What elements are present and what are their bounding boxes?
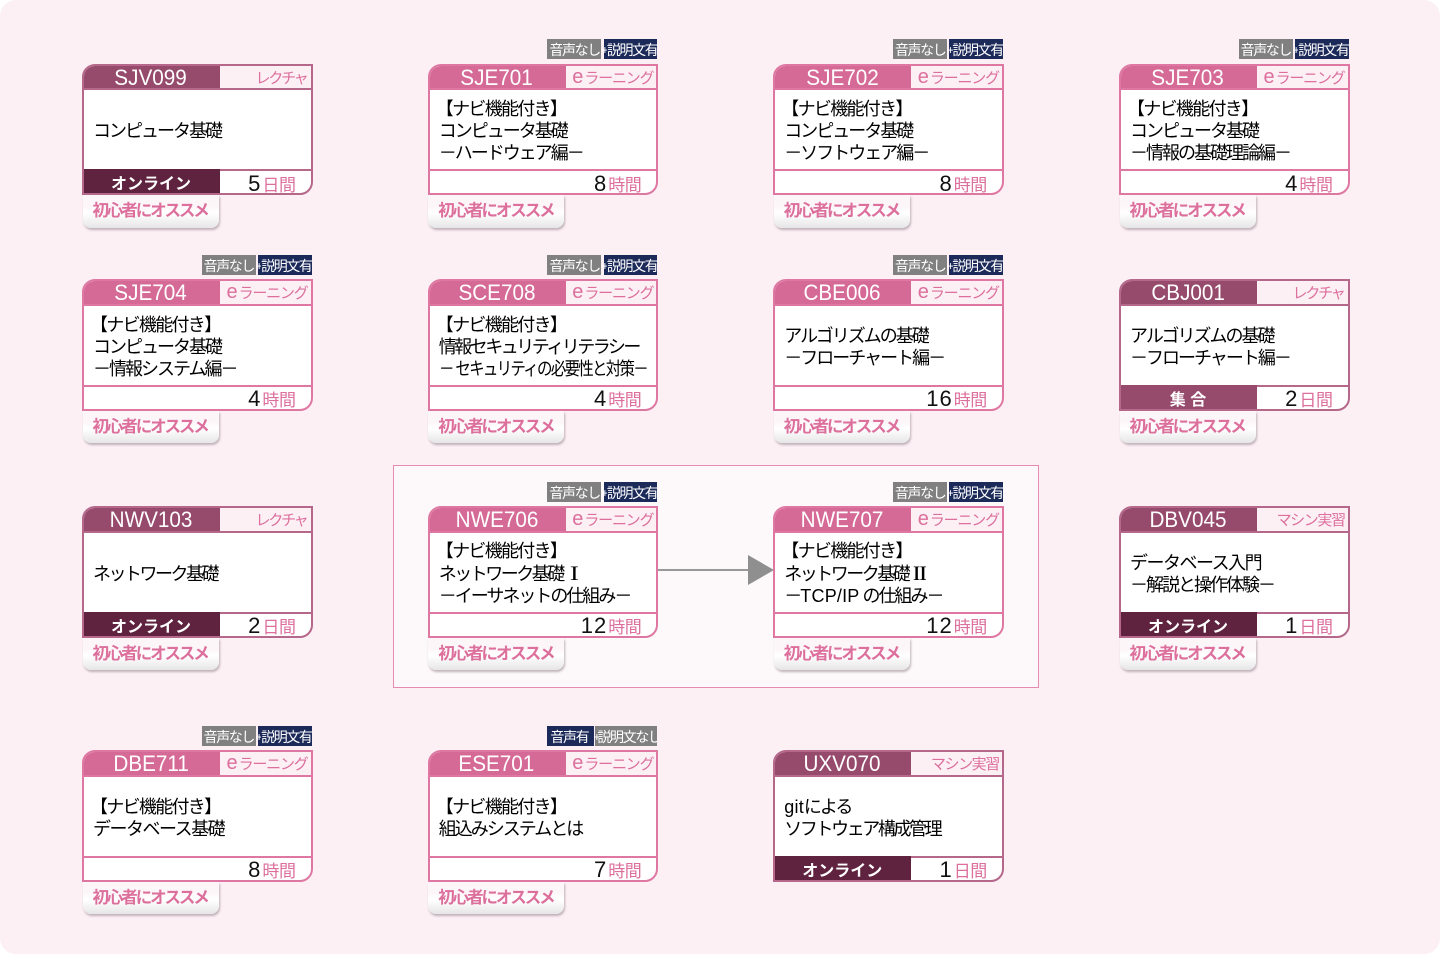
course card: ESE701: + xyxy=(593,730,599,744)
course card: SCE708: 4時間 xyxy=(594,386,641,411)
course card: CBE006: + xyxy=(947,259,952,273)
course card: ESE701 xyxy=(428,726,658,918)
course card: SJE702: SJE702 xyxy=(806,64,879,90)
course card: NWE706: ネットワーク基礎 Ⅰ xyxy=(439,560,583,586)
course card: NWV103: NWV103 xyxy=(110,507,192,532)
course card: NWE706: 12時間 xyxy=(581,613,641,638)
course card: DBV045: オンライン xyxy=(1148,619,1228,636)
course card: NWE706: －イーサネットの仕組み－ xyxy=(439,586,630,606)
course card: SCE708: 【ナビ機能付き】 xyxy=(436,315,566,335)
course card: CBJ001: レクチャ xyxy=(1293,285,1344,302)
course card: SJE701: SJE701 xyxy=(461,64,533,90)
course card: SCE708 xyxy=(428,255,658,446)
course card: SJE701: 音声なし xyxy=(549,42,600,58)
course card: SCE708: eラーニング xyxy=(572,281,653,303)
course card: SJE702: 8時間 xyxy=(939,170,987,195)
course card: UXV070: マシン実習 xyxy=(931,756,999,773)
course card: NWV103: ネットワーク基礎 xyxy=(93,564,217,584)
course card: NWE707 xyxy=(773,482,1004,674)
course card: UXV070 xyxy=(773,750,1004,882)
course card: SJE704: 音声なし xyxy=(204,258,254,274)
course card: SCE708: 音声なし xyxy=(549,258,600,274)
course card: SJE702: コンピュータ基礎 xyxy=(784,121,912,141)
course card: SJE702: 初心者にオススメ xyxy=(784,202,899,220)
course card: SCE708: SCE708 xyxy=(458,280,535,305)
course card: NWE706: 【ナビ機能付き】 xyxy=(436,541,566,561)
course card: ESE701: ESE701 xyxy=(459,751,535,776)
course card: UXV070: gitによる xyxy=(784,797,851,817)
course card: SJE704 xyxy=(82,255,313,446)
course card: CBE006: －フローチャート編－ xyxy=(784,348,944,368)
course card: CBJ001: －フローチャート編－ xyxy=(1130,348,1290,368)
course card: NWE707: 12時間 xyxy=(926,613,987,638)
course card: CBJ001: アルゴリズムの基礎 xyxy=(1130,326,1273,346)
course card: NWE707: ネットワーク基礎 Ⅱ xyxy=(784,560,929,586)
course card: CBE006: 16時間 xyxy=(926,386,987,411)
course card: SJE703: コンピュータ基礎 xyxy=(1130,121,1258,141)
course card: ESE701: 組込みシステムとは xyxy=(439,819,582,839)
course card: NWV103: 2日間 xyxy=(248,613,296,638)
course card: CBE006 xyxy=(773,255,1004,446)
course card: DBV045: －解説と操作体験－ xyxy=(1130,575,1274,595)
course card: SJE702: 説明文有 xyxy=(952,42,1003,58)
course card: SJE702: －ソフトウェア編－ xyxy=(784,143,928,163)
course card: SJE704: 【ナビ機能付き】 xyxy=(90,315,220,335)
course card: NWV103 xyxy=(82,506,313,674)
course card: SCE708: 情報セキュリティリテラシー xyxy=(439,337,639,357)
course card: CBE006: CBE006 xyxy=(804,280,881,305)
course card: SJE702: 【ナビ機能付き】 xyxy=(781,99,912,119)
course card: SJE701: 【ナビ機能付き】 xyxy=(436,99,566,119)
arrow: NWE706 to NWE707 xyxy=(658,555,773,585)
course card: CBE006: アルゴリズムの基礎 xyxy=(784,326,928,346)
course card: DBV045: 初心者にオススメ xyxy=(1130,645,1245,663)
course card: SCE708: 初心者にオススメ xyxy=(438,418,554,436)
course card: NWE706: NWE706 xyxy=(455,507,538,532)
course card: SJE703: 初心者にオススメ xyxy=(1130,202,1245,220)
course card: NWE706 xyxy=(428,482,658,674)
course card: CBE006: 初心者にオススメ xyxy=(784,418,899,436)
course card: NWV103: 初心者にオススメ xyxy=(92,645,208,663)
course card: SJE703: 【ナビ機能付き】 xyxy=(1127,99,1257,119)
course card: SJE703 xyxy=(1119,39,1350,232)
course card: SJE703: SJE703 xyxy=(1152,64,1224,90)
course card: NWE707: －TCP/IP の仕組み－ xyxy=(784,586,943,606)
course card: SJE704: コンピュータ基礎 xyxy=(93,337,221,357)
panel: network course group frame xyxy=(393,465,1039,688)
course card: CBE006: 音声なし xyxy=(895,258,945,274)
course card: SJE704: 初心者にオススメ xyxy=(92,418,208,436)
course card: SJE701: + xyxy=(601,43,607,57)
course card: ESE701: 7時間 xyxy=(594,857,641,882)
course card: DBE711: DBE711 xyxy=(113,751,189,776)
course card: DBE711: 音声なし xyxy=(204,729,254,745)
course card: DBE711: eラーニング xyxy=(226,752,308,774)
course card: SJE704: －情報システム編－ xyxy=(93,359,236,379)
course card: NWE707: eラーニング xyxy=(918,508,999,530)
course card: CBJ001 xyxy=(1119,279,1350,446)
course card: SJE701: コンピュータ基礎 xyxy=(439,121,567,141)
course card: NWE707: NWE707 xyxy=(801,507,884,532)
course card: SJV099: レクチャ xyxy=(256,70,307,86)
course card: DBE711: 【ナビ機能付き】 xyxy=(90,797,220,817)
course card: CBJ001: 初心者にオススメ xyxy=(1130,418,1245,436)
course card: DBE711: 8時間 xyxy=(248,857,296,882)
course card: DBV045: DBV045 xyxy=(1149,507,1227,532)
course card: CBE006: 説明文有 xyxy=(952,258,1003,274)
course card: SJE702 xyxy=(773,39,1004,232)
course card: SJE704: 説明文有 xyxy=(261,258,312,274)
course card: DBV045: 1日間 xyxy=(1285,613,1333,638)
course card: NWE707: 説明文有 xyxy=(952,485,1003,501)
course card: DBE711: 説明文有 xyxy=(261,729,312,745)
course card: ESE701: eラーニング xyxy=(572,752,653,774)
course card: NWE706: 初心者にオススメ xyxy=(438,645,554,663)
course card: NWE707: 音声なし xyxy=(895,485,945,501)
course card: SJE704: 4時間 xyxy=(248,386,296,411)
course card: NWE706: eラーニング xyxy=(572,508,653,530)
course card: SJE701: 初心者にオススメ xyxy=(438,202,554,220)
course card: SJE703: 説明文有 xyxy=(1298,42,1348,58)
course card: NWE707: 【ナビ機能付き】 xyxy=(781,541,912,561)
course card: SJE703: 4時間 xyxy=(1285,170,1333,195)
course card: DBV045: マシン実習 xyxy=(1277,512,1345,529)
course card: CBE006: eラーニング xyxy=(918,281,999,303)
course card: UXV070: 1日間 xyxy=(939,857,987,882)
course card: SCE708: 説明文有 xyxy=(607,258,657,274)
course card: DBV045: データベース入門 xyxy=(1130,553,1261,573)
course card: ESE701: 初心者にオススメ xyxy=(438,889,554,907)
course card: NWE706: 説明文有 xyxy=(607,485,657,501)
course card: SCE708: － セキュリティの必要性と対策－ xyxy=(439,359,647,379)
course card: UXV070: オンライン xyxy=(802,863,882,880)
course card: SJE701: 8時間 xyxy=(594,170,641,195)
course card: SJV099: 5日間 xyxy=(248,170,296,195)
course card: NWE707: + xyxy=(947,486,952,500)
course card: SJE704: eラーニング xyxy=(226,281,308,303)
course card: SJE703: + xyxy=(1293,43,1298,57)
course card: CBJ001: 集 合 xyxy=(1170,392,1206,409)
course card: SJE703: eラーニング xyxy=(1263,66,1345,88)
course card: DBE711: 初心者にオススメ xyxy=(92,889,208,907)
course card: CBJ001: 2日間 xyxy=(1285,386,1333,411)
course card: SJE704: + xyxy=(256,259,261,273)
course card: CBJ001: CBJ001 xyxy=(1151,280,1225,305)
course card: SJE703: 音声なし xyxy=(1241,42,1291,58)
course card: SJE702: 音声なし xyxy=(895,42,945,58)
course card: SJV099 xyxy=(82,64,313,232)
course card: SJV099: SJV099 xyxy=(115,64,187,90)
course card: SJV099: コンピュータ基礎 xyxy=(93,121,221,141)
course card: NWV103: レクチャ xyxy=(256,512,307,529)
course card: NWE707: 初心者にオススメ xyxy=(784,645,899,663)
course card: NWE706: + xyxy=(601,486,607,500)
course card: SJE701 xyxy=(428,39,658,232)
course card: SJE701: eラーニング xyxy=(572,66,653,88)
course card: SJE702: + xyxy=(947,43,952,57)
course card: SCE708: + xyxy=(601,259,607,273)
course card: DBE711: データベース基礎 xyxy=(93,819,224,839)
course card: SJE701: 説明文有 xyxy=(607,42,657,58)
course card: ESE701: 【ナビ機能付き】 xyxy=(436,797,566,817)
course card: NWE706: 音声なし xyxy=(549,485,600,501)
course card: NWV103: オンライン xyxy=(111,619,191,636)
course card: UXV070: ソフトウェア構成管理 xyxy=(784,819,940,839)
course card: ESE701: 音声有 xyxy=(550,729,588,745)
course card: SJV099: 初心者にオススメ xyxy=(92,202,208,220)
course card: UXV070: UXV070 xyxy=(804,751,881,776)
course card: DBE711 xyxy=(82,726,313,918)
course card: SJE704: SJE704 xyxy=(115,280,187,305)
course card: SJE703: －情報の基礎理論編－ xyxy=(1130,143,1290,163)
course card: DBV045 xyxy=(1119,506,1350,674)
course card: SJE702: eラーニング xyxy=(918,66,999,88)
course card: SJV099: オンライン xyxy=(111,176,191,193)
course card: DBE711: + xyxy=(256,730,261,744)
course card: SJE701: －ハードウェア編－ xyxy=(439,143,583,163)
